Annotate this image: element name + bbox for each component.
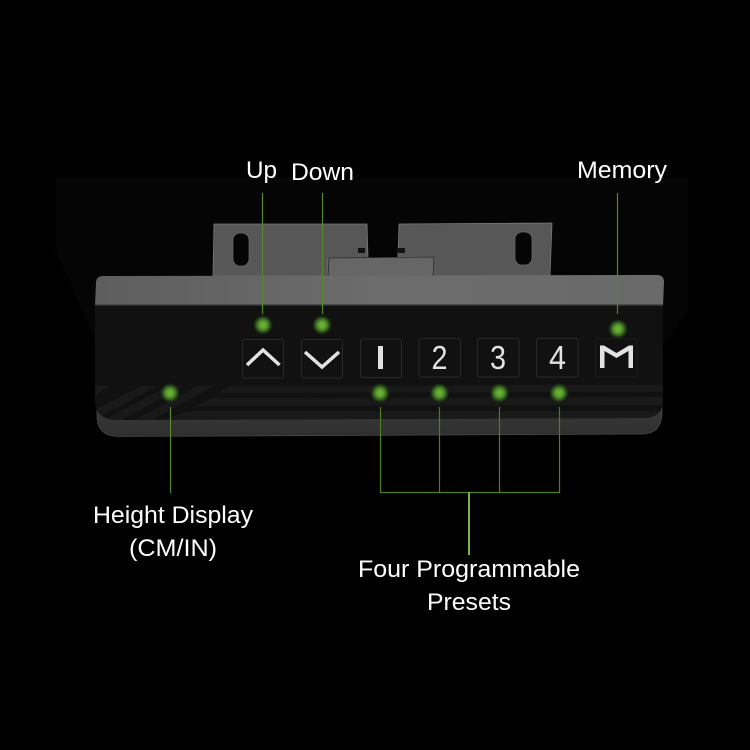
right mounting bracket bbox=[398, 223, 552, 276]
control panel device bbox=[90, 223, 664, 436]
background: faint desk silhouette bbox=[55, 178, 689, 350]
bottom lip bbox=[97, 395, 662, 436]
indicator dots bbox=[160, 315, 628, 403]
label: Down: Down bbox=[291, 159, 354, 186]
front face bbox=[95, 304, 663, 420]
button: memory bbox=[596, 338, 637, 377]
left mounting bracket bbox=[213, 224, 368, 276]
front face stripes bbox=[97, 410, 98, 411]
button: down bbox=[302, 340, 342, 378]
button: preset 3: 3 bbox=[490, 339, 506, 376]
button: preset 4 bbox=[536, 338, 578, 377]
button: preset 4: 4 bbox=[549, 339, 566, 376]
button: preset 3 bbox=[478, 338, 519, 377]
center tab bbox=[328, 257, 434, 277]
button: preset 2 bbox=[419, 338, 460, 377]
button: preset 2: 2 bbox=[432, 339, 448, 376]
label: Height Display: Height Display bbox=[93, 502, 253, 529]
label: Up: Up bbox=[246, 157, 277, 184]
label: Memory: Memory bbox=[577, 157, 667, 184]
button: preset 1 bbox=[360, 339, 402, 378]
button: up bbox=[242, 340, 284, 378]
top face bbox=[95, 275, 664, 306]
callout lines bbox=[170, 193, 618, 555]
label: CM/IN: (CM/IN) bbox=[129, 535, 217, 562]
label: Presets: Presets bbox=[427, 589, 511, 616]
label: Four Programmable: Four Programmable bbox=[358, 556, 580, 583]
bracket small notches bbox=[358, 248, 405, 253]
